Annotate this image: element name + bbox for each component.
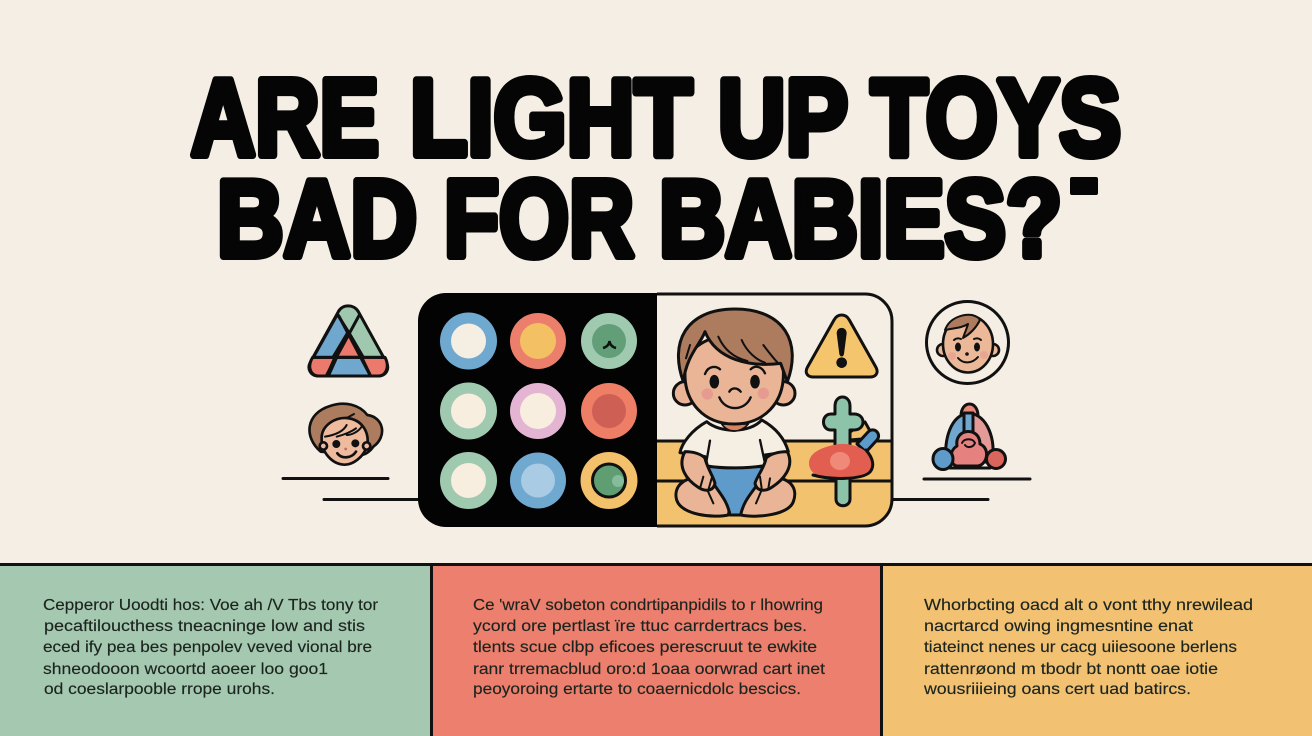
title: ARE bbox=[191, 57, 379, 179]
icon: baby portrait in circle bbox=[926, 302, 1008, 384]
icon: baby backpack toy bbox=[933, 404, 1006, 470]
green panel text bbox=[43, 597, 379, 698]
shirt bbox=[680, 420, 788, 468]
panel: baby scene background bbox=[657, 294, 892, 526]
title: BAD bbox=[217, 158, 417, 280]
icon: child face left bbox=[310, 404, 382, 465]
red panel text bbox=[473, 597, 826, 698]
leader lines left bbox=[283, 478, 420, 500]
title: FOR bbox=[444, 158, 634, 280]
title: TOYS bbox=[871, 57, 1121, 179]
green panel text: Cepperor Uoodti hos: Voe ah /V Tbs tony tor bbox=[43, 597, 379, 614]
diaper bbox=[707, 467, 765, 515]
yellow floor band bbox=[657, 441, 892, 526]
title: LIGHT bbox=[410, 57, 692, 179]
panel borders bbox=[0, 563, 1312, 736]
icon: warning triangle bbox=[806, 315, 877, 377]
red panel text: tlents scue clbp eficoes perescruut te ewkite bbox=[473, 639, 817, 656]
title: BABIES? bbox=[659, 158, 1062, 280]
light buttons grid bbox=[440, 312, 638, 509]
green panel text: pecaftiloucthess tneacninge low and stis bbox=[44, 618, 365, 635]
yellow panel text: nacrtarcd owing ingmesntine enat bbox=[924, 618, 1194, 635]
red panel text: Ce 'wraV sobeton condrtipanpidils to r lhowring bbox=[473, 597, 823, 614]
leader lines right bbox=[893, 479, 1030, 500]
baby legs bbox=[676, 478, 729, 516]
title: UP bbox=[718, 57, 848, 179]
yellow panel text: tiateinct nenes ur cacg uiiesoone berlens bbox=[924, 639, 1237, 656]
green panel text: od coeslarpooble rrope urohs. bbox=[44, 681, 275, 698]
face features bbox=[711, 376, 718, 387]
yellow panel text bbox=[923, 597, 1253, 698]
title bbox=[191, 57, 1121, 280]
panel outline bbox=[657, 294, 892, 526]
icon: colorful triangle bbox=[309, 306, 388, 376]
panel: green fact box bbox=[0, 565, 431, 736]
yellow panel text: Whorbcting oacd alt o vont tthy nrewilead bbox=[924, 597, 1253, 614]
red panel text: peoyoroing ertarte to coaernicdolc bescics. bbox=[473, 681, 801, 698]
head bbox=[673, 382, 697, 405]
panel: yellow fact box bbox=[881, 565, 1312, 736]
red panel text: ycord ore pertlast ïre ttuc carrdertracs bes. bbox=[473, 618, 807, 635]
yellow panel text: rattenrøond m tbodr bt nontt oae iotie bbox=[924, 661, 1218, 678]
panel: red fact box bbox=[431, 565, 881, 736]
icon: rattle toy bbox=[809, 397, 879, 506]
illustration: seated baby bbox=[673, 309, 795, 516]
green panel text: eced ify pea bes penpolev veved vional bre bbox=[43, 639, 372, 656]
arms bbox=[682, 452, 715, 490]
panel: black light-button board bbox=[418, 293, 657, 527]
red panel text: ranr trremacblud oro:d 1oaa oorwrad cart inet bbox=[473, 661, 826, 678]
yellow panel text: wousriiieing oans cert uad batircs. bbox=[923, 681, 1191, 698]
green panel text: shneodooon wcoortd aoeer loo goo1 bbox=[43, 661, 328, 678]
panel: central toy display bbox=[418, 293, 892, 527]
